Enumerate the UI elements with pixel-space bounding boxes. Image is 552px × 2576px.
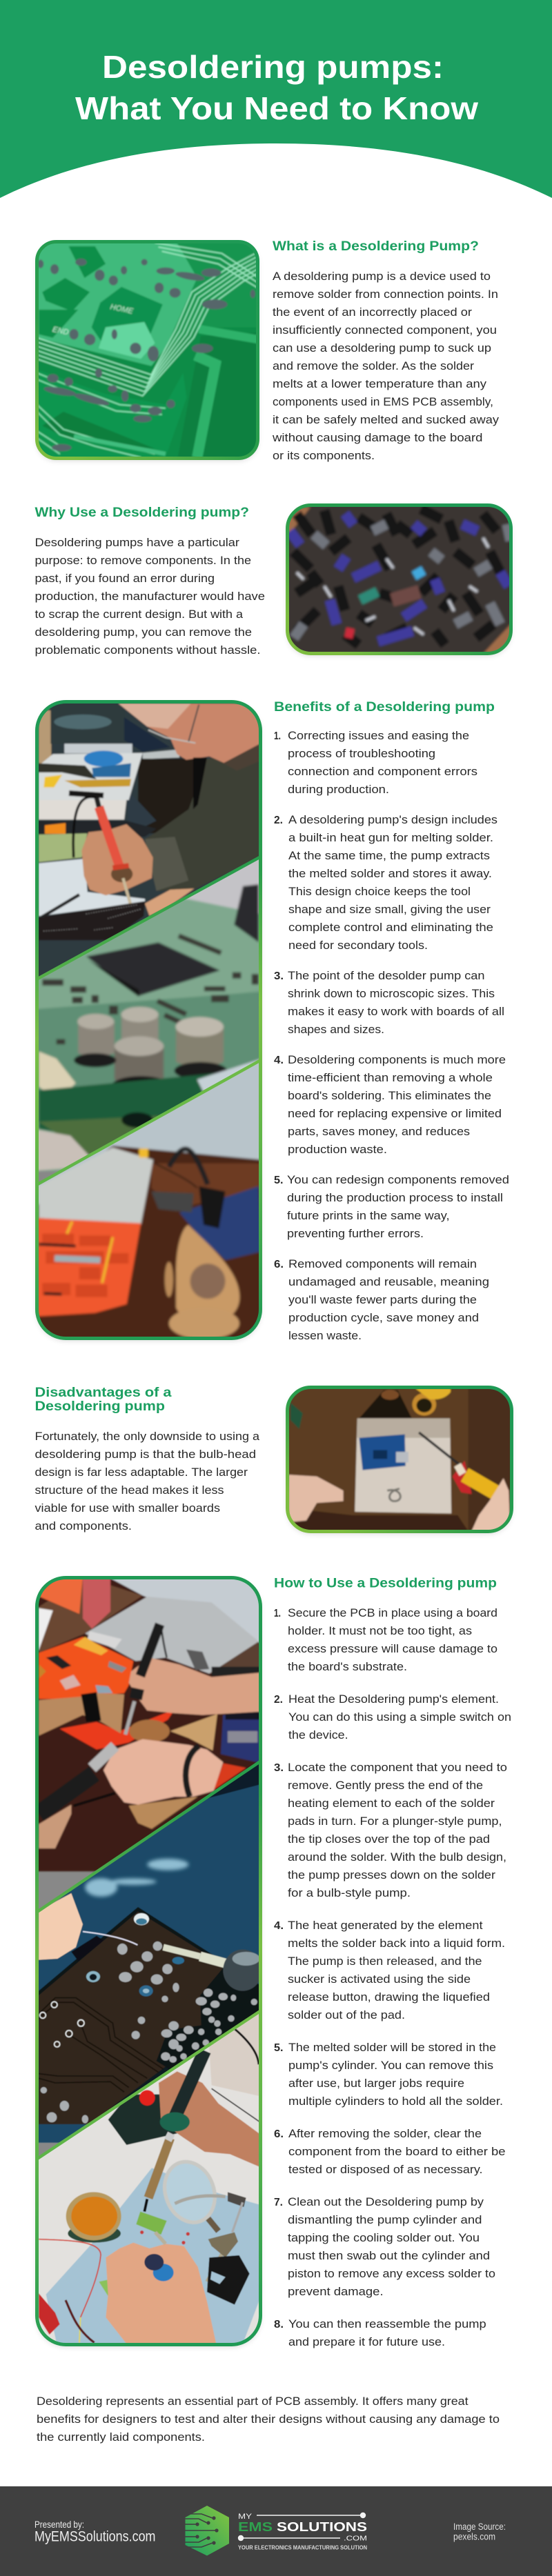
- step 1: Secure the PCB in place using a board: [288, 1607, 497, 1619]
- step 5: [274, 2041, 503, 2108]
- closing paragraph: benefits for designers to test and alter their designs without causing any damage to: [37, 2413, 500, 2426]
- panel: disadvantages of a desoldering pump: [34, 1381, 521, 1540]
- panel: how to use a desoldering pump: [28, 1572, 511, 2364]
- body text: purpose: to remove components. In the: [34, 555, 251, 567]
- benefit 3: shapes and sizes.: [288, 1024, 384, 1036]
- step 3: the tip closes over the top of the pad: [288, 1833, 490, 1846]
- step 4: melts the solder back into a liquid form.: [288, 1937, 505, 1950]
- title: Desoldering pumps:: [102, 49, 444, 85]
- body text: insufficiently connected component, you: [273, 324, 497, 337]
- step 3: pads in turn. For a plunger-style pump,: [288, 1815, 502, 1828]
- benefit 4: 4.: [274, 1055, 284, 1066]
- step 3: remove. Gently press the end of the: [288, 1779, 483, 1792]
- panel: benefits of a desoldering pump: [28, 697, 509, 1350]
- benefits list: [274, 730, 509, 1342]
- header banner: [0, 0, 552, 198]
- step 7: Clean out the Desoldering pump by: [288, 2196, 484, 2208]
- body text: remove solder from connection points. In: [273, 288, 498, 301]
- step 7: dismantling the pump cylinder and: [288, 2214, 482, 2226]
- body text: and components.: [34, 1520, 132, 1532]
- wordmark: SOLUTIONS: [277, 2519, 367, 2534]
- image source: Image Source:: [453, 2522, 506, 2532]
- photo collage: soldering: [28, 697, 271, 1350]
- step 1: 1.: [274, 1608, 281, 1619]
- body text: or its components.: [273, 450, 375, 462]
- step 2: You can do this using a simple switch on: [288, 1711, 511, 1724]
- step 2: [274, 1693, 511, 1741]
- step 5: 5.: [274, 2042, 283, 2054]
- benefit 5: preventing further errors.: [287, 1228, 424, 1240]
- benefit 6: undamaged and reusable, meaning: [288, 1276, 489, 1288]
- benefit 5: during the production process to install: [287, 1192, 503, 1204]
- benefit 3: makes it easy to work with boards of all: [288, 1006, 504, 1018]
- panel: why use a desoldering pump: [34, 498, 518, 660]
- benefit 2: A desoldering pump's design includes: [288, 814, 497, 826]
- step 1: [274, 1607, 497, 1673]
- step 3: Locate the component that you need to: [288, 1761, 507, 1774]
- photo: man soldering: [39, 703, 259, 977]
- benefit 6: 6.: [274, 1259, 284, 1270]
- benefit 5: You can redesign components removed: [287, 1174, 509, 1186]
- body text: production, the manufacturer would have: [34, 590, 265, 603]
- benefit 2: This design choice keeps the tool: [288, 886, 471, 898]
- step 5: pump's cylinder. You can remove this: [288, 2059, 493, 2072]
- step 6: tested or disposed of as necessary.: [288, 2164, 483, 2176]
- logo: [185, 2506, 367, 2556]
- body text: [34, 537, 265, 657]
- photo collage: using desoldering tools: [28, 1572, 271, 2364]
- closing paragraph: Desoldering represents an essential part of PCB assembly. It offers many great: [37, 2395, 469, 2408]
- benefit 3: [274, 970, 504, 1036]
- step 3: 3.: [274, 1762, 284, 1774]
- benefit 4: parts, saves money, and reduces: [288, 1126, 470, 1138]
- benefit 1: during production.: [288, 783, 389, 796]
- photo: pile of capacitors: [279, 498, 518, 660]
- body text: to scrap the current design. But with a: [34, 608, 243, 621]
- footer: [0, 2486, 552, 2576]
- benefit 1: process of troubleshooting: [288, 748, 435, 760]
- benefit 2: need for secondary tools.: [288, 939, 428, 952]
- photo: arduino on a desk: [282, 1381, 521, 1540]
- photo: green circuit board: END: [52, 326, 70, 337]
- step 1: holder. It must not be too tight, as: [288, 1625, 472, 1637]
- heading: How to Use a Desoldering pump: [274, 1575, 497, 1590]
- image source: [453, 2522, 506, 2542]
- photo: hands with heat gun: [39, 1579, 259, 1873]
- title: [75, 49, 479, 126]
- benefit 5: future prints in the same way,: [287, 1210, 450, 1222]
- benefit 1: Correcting issues and easing the: [288, 730, 469, 742]
- step 4: The heat generated by the element: [288, 1919, 483, 1932]
- body text: Desoldering pumps have a particular: [34, 537, 240, 549]
- body text: design is far less adaptable. The larger: [34, 1466, 248, 1479]
- step 4: sucker is activated using the side: [288, 1973, 471, 1986]
- benefit 4: time-efficient than removing a whole: [288, 1072, 493, 1084]
- step 8: [274, 2318, 486, 2348]
- step 2: 2.: [274, 1694, 283, 1706]
- benefit 2: 2.: [274, 815, 283, 826]
- step 3: [274, 1761, 507, 1899]
- body text: desoldering pump, you can remove the: [34, 626, 252, 639]
- step 5: The melted solder will be stored in the: [288, 2041, 496, 2054]
- wordmark: .COM: [344, 2534, 367, 2542]
- step 5: after use, but larger jobs require: [288, 2077, 464, 2090]
- body text: without causing damage to the board: [272, 432, 483, 444]
- step 3: the pump presses down on the solder: [288, 1869, 496, 1881]
- step 6: component from the board to either be: [288, 2146, 506, 2158]
- step 8: and prepare it for future use.: [288, 2336, 445, 2348]
- body text: melts at a lower temperature than any: [273, 378, 487, 390]
- body text: A desoldering pump is a device used to: [273, 270, 491, 283]
- body text: and remove the solder. As the solder: [273, 360, 475, 372]
- benefit 3: 3.: [274, 970, 284, 982]
- benefit 1: 1.: [274, 730, 281, 742]
- icon: circuit hexagon: [185, 2506, 229, 2556]
- benefit 2: a built-in heat gun for melting solder.: [288, 832, 493, 844]
- benefit 1: connection and component errors: [288, 766, 477, 778]
- body text: components used in EMS PCB assembly,: [273, 396, 493, 408]
- heading: Disadvantages of a: [34, 1385, 172, 1400]
- body text: past, if you found an error during: [34, 572, 215, 585]
- body text: the event of an incorrectly placed or: [273, 306, 473, 319]
- step 7: [274, 2196, 495, 2298]
- step 6: [274, 2128, 506, 2176]
- benefit 5: [274, 1174, 509, 1240]
- photo: workbench with tools: [39, 1063, 259, 1337]
- panel: what is a desoldering pump: [32, 236, 500, 464]
- benefit 3: The point of the desolder pump can: [288, 970, 484, 982]
- benefit 4: need for replacing expensive or limited: [288, 1108, 502, 1120]
- step 6: After removing the solder, clear the: [288, 2128, 482, 2140]
- benefit 4: [274, 1054, 506, 1156]
- step 4: 4.: [274, 1920, 284, 1932]
- step 4: The pump is then released, and the: [288, 1955, 482, 1968]
- step 3: heating element to each of the solder: [288, 1797, 495, 1810]
- wordmark: EMS: [238, 2519, 273, 2534]
- presented by: Presented by:: [34, 2519, 84, 2530]
- presented by: MyEMSSolutions.com: [34, 2528, 156, 2545]
- step 8: 8.: [274, 2319, 284, 2330]
- benefit 4: production waste.: [288, 1144, 387, 1156]
- step 4: [274, 1919, 505, 2021]
- step 8: You can then reassemble the pump: [288, 2318, 486, 2330]
- step 1: excess pressure will cause damage to: [288, 1643, 497, 1655]
- benefit 6: you'll waste fewer parts during the: [288, 1294, 477, 1306]
- step 4: release button, drawing the liquefied: [288, 1991, 490, 2004]
- body text: structure of the head makes it less: [34, 1484, 224, 1497]
- title: What You Need to Know: [75, 90, 479, 126]
- step 5: multiple cylinders to hold all the solder.: [288, 2095, 503, 2108]
- body text: [34, 1430, 259, 1532]
- step 2: Heat the Desoldering pump's element.: [288, 1693, 499, 1706]
- step 7: prevent damage.: [288, 2286, 384, 2298]
- benefit 2: shape and size small, giving the user: [288, 903, 491, 916]
- benefit 4: board's soldering. This eliminates the: [288, 1090, 491, 1102]
- body text: can use a desoldering pump to suck up: [273, 342, 491, 355]
- benefit 6: Removed components will remain: [288, 1258, 477, 1270]
- benefit 2: At the same time, the pump extracts: [288, 850, 490, 862]
- body text: desoldering pump is that the bulb-head: [34, 1448, 256, 1461]
- step 2: the device.: [288, 1729, 348, 1741]
- heading: Benefits of a Desoldering pump: [274, 699, 495, 715]
- closing paragraph: the currently laid components.: [37, 2431, 205, 2444]
- benefit 6: [274, 1258, 489, 1342]
- benefit 2: [274, 814, 497, 952]
- image source: pexels.com: [453, 2531, 495, 2542]
- step 7: must then swab out the cylinder and: [288, 2250, 490, 2262]
- benefit 5: 5.: [274, 1175, 283, 1186]
- wordmark: YOUR ELECTRONICS MANUFACTURING SOLUTION: [238, 2544, 367, 2550]
- benefit 3: shrink down to microscopic sizes. This: [288, 988, 495, 1000]
- benefit 6: production cycle, save money and: [288, 1312, 479, 1324]
- photo: circuit board with capacitors: [32, 855, 268, 1171]
- photo: green circuit board: [32, 236, 264, 464]
- body text: Fortunately, the only downside to using a: [34, 1430, 259, 1443]
- heading: [34, 1385, 172, 1414]
- step 4: solder out of the pad.: [288, 2009, 405, 2021]
- step 7: tapping the cooling solder out. You: [288, 2232, 480, 2244]
- body text: problematic components without hassle.: [34, 644, 261, 657]
- benefit 6: lessen waste.: [288, 1330, 362, 1342]
- steps list: [274, 1607, 511, 2348]
- wordmark: [238, 2513, 367, 2550]
- step 1: the board's substrate.: [288, 1661, 407, 1673]
- benefit 1: [274, 730, 477, 796]
- step 6: 6.: [274, 2128, 284, 2140]
- wordmark: MY: [238, 2513, 253, 2521]
- benefit 2: the melted solder and stores it away.: [288, 868, 492, 880]
- step 7: piston to remove any excess solder to: [288, 2268, 495, 2280]
- photo: green circuit board: HOME: [110, 303, 134, 316]
- photo: soldering iron on dark PCB: [39, 1764, 259, 2144]
- benefit 2: complete control and eliminating the: [288, 921, 493, 934]
- body text: it can be safely melted and sucked away: [273, 414, 500, 426]
- photo: soldering with magnifier: [39, 2014, 259, 2343]
- heading: Desoldering pump: [34, 1399, 165, 1414]
- heading: Why Use a Desoldering pump?: [34, 505, 249, 520]
- heading: What is a Desoldering Pump?: [273, 239, 479, 254]
- body text: [272, 270, 500, 462]
- step 3: for a bulb-style pump.: [288, 1887, 411, 1899]
- benefit 4: Desoldering components is much more: [288, 1054, 506, 1066]
- step 3: around the solder. With the bulb design,: [288, 1851, 506, 1864]
- closing paragraph: [37, 2395, 500, 2444]
- body text: viable for use with smaller boards: [34, 1502, 220, 1515]
- presented by: [34, 2519, 156, 2545]
- step 7: 7.: [274, 2197, 283, 2208]
